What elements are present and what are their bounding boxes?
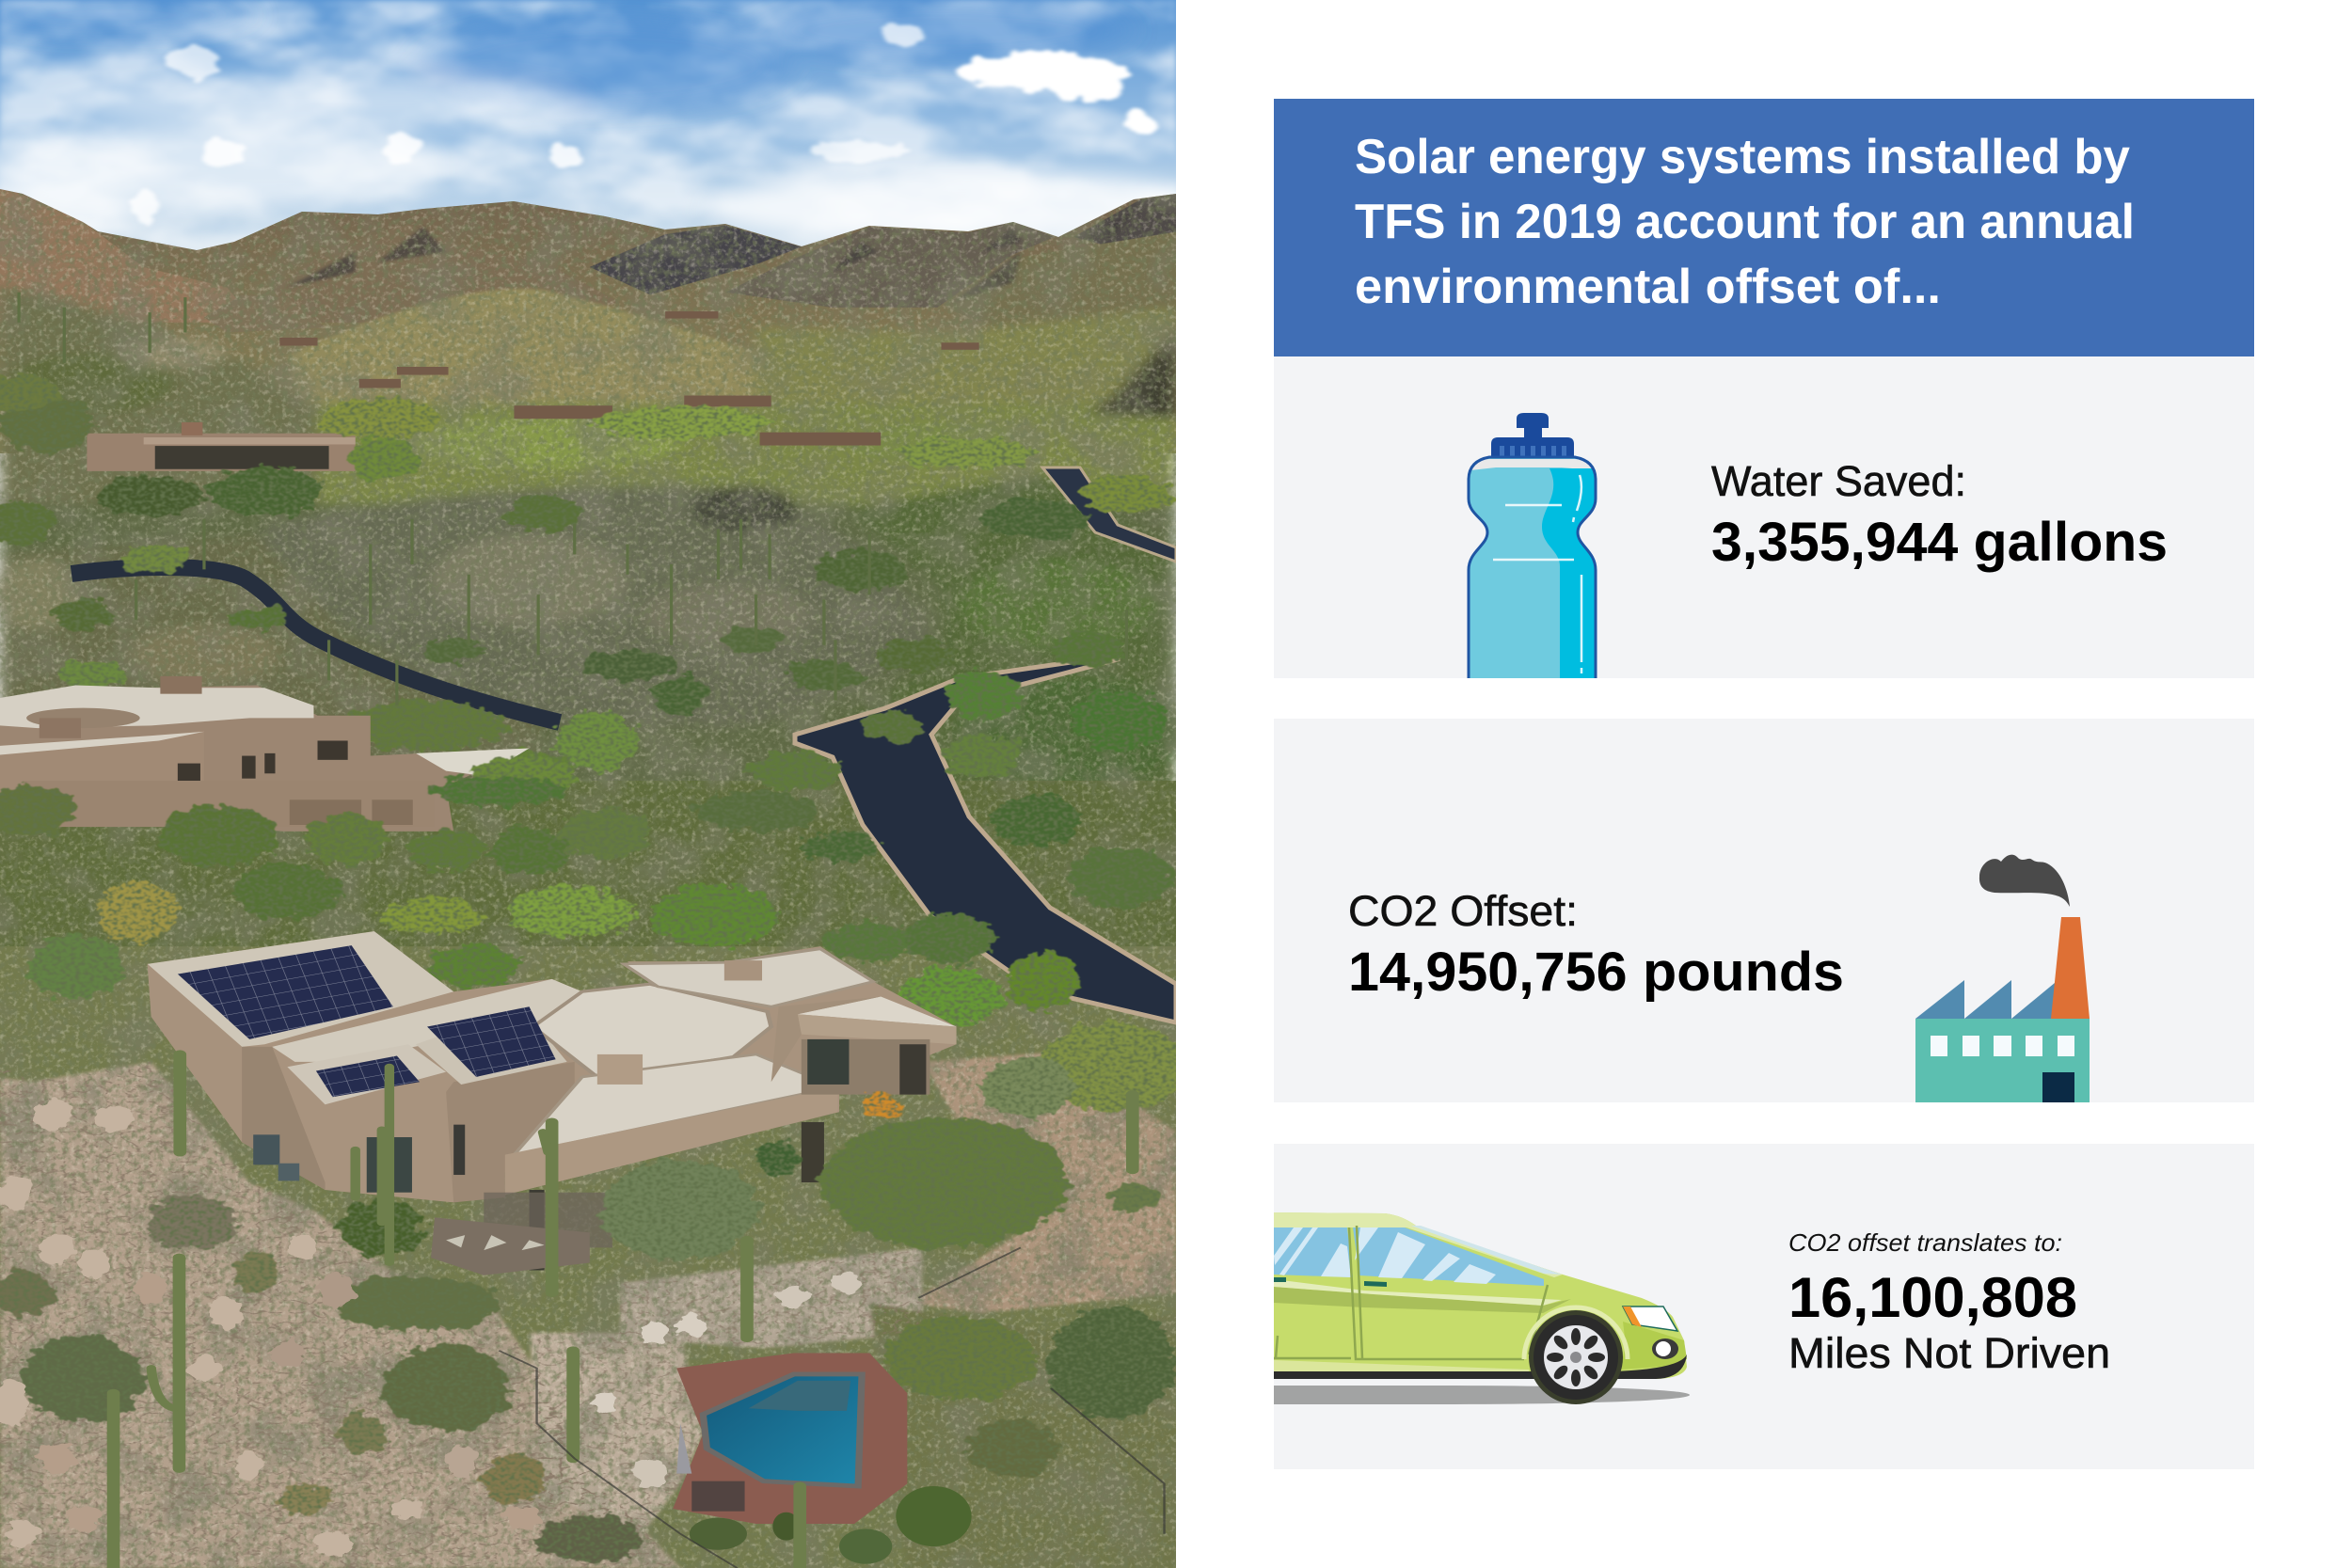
- CO2 offset label: CO2 Offset:: [1348, 887, 1578, 935]
- swimming pool: [703, 1374, 862, 1486]
- saguaro cacti: [114, 1054, 1133, 1568]
- left house garage base: [58, 781, 413, 828]
- miles value: 16,100,808: [1788, 1266, 2077, 1329]
- icon: green car: [1274, 1212, 1690, 1404]
- icon: factory with smoke: [1915, 855, 2090, 1102]
- solar home: [148, 931, 957, 1275]
- rooftop solar panels: [178, 945, 556, 1097]
- vegetation and rock texture: [0, 188, 1176, 1568]
- front trees: [0, 1057, 1176, 1561]
- main house and lower hillside details: [0, 776, 1187, 1568]
- translation label: CO2 offset translates to:: [1788, 1228, 2062, 1257]
- headline text: [1355, 130, 2135, 314]
- pool deck: [673, 1354, 907, 1524]
- roads: [72, 467, 1176, 1022]
- upper distant houses and bushes: [0, 293, 1172, 791]
- icon: water bottle: [1469, 413, 1596, 678]
- panel: headline banner: [1274, 99, 2254, 356]
- miles label: Miles Not Driven: [1788, 1329, 2110, 1377]
- rocks on slope: [0, 1099, 862, 1557]
- headline text: TFS in 2019 account for an annual: [1355, 195, 2135, 249]
- headline text: Solar energy systems installed by: [1355, 130, 2130, 184]
- sky with clouds: [0, 0, 1176, 250]
- photo: desert hillside homes with solar panels: [0, 0, 1232, 1568]
- headline text: environmental offset of...: [1355, 260, 1941, 314]
- panel: miles not driven: [1274, 1144, 2254, 1469]
- panel: water saved: [1274, 356, 2254, 678]
- fence: [499, 1247, 1165, 1568]
- panel: CO2 offset: [1274, 719, 2254, 1102]
- green trees and shrubs around house: [0, 776, 1187, 1112]
- water saved label: Water Saved:: [1711, 457, 1966, 505]
- rock cracks: [0, 1063, 922, 1568]
- land: mountains and valley base colours: [0, 186, 1187, 1568]
- water saved value: 3,355,944 gallons: [1711, 512, 2168, 573]
- pool furniture and shrubs: [676, 1423, 972, 1564]
- small cacti: [19, 293, 1149, 705]
- left house in middle ground: [0, 676, 575, 832]
- CO2 offset value: 14,950,756 pounds: [1348, 942, 1844, 1003]
- house on upper left: [87, 422, 356, 471]
